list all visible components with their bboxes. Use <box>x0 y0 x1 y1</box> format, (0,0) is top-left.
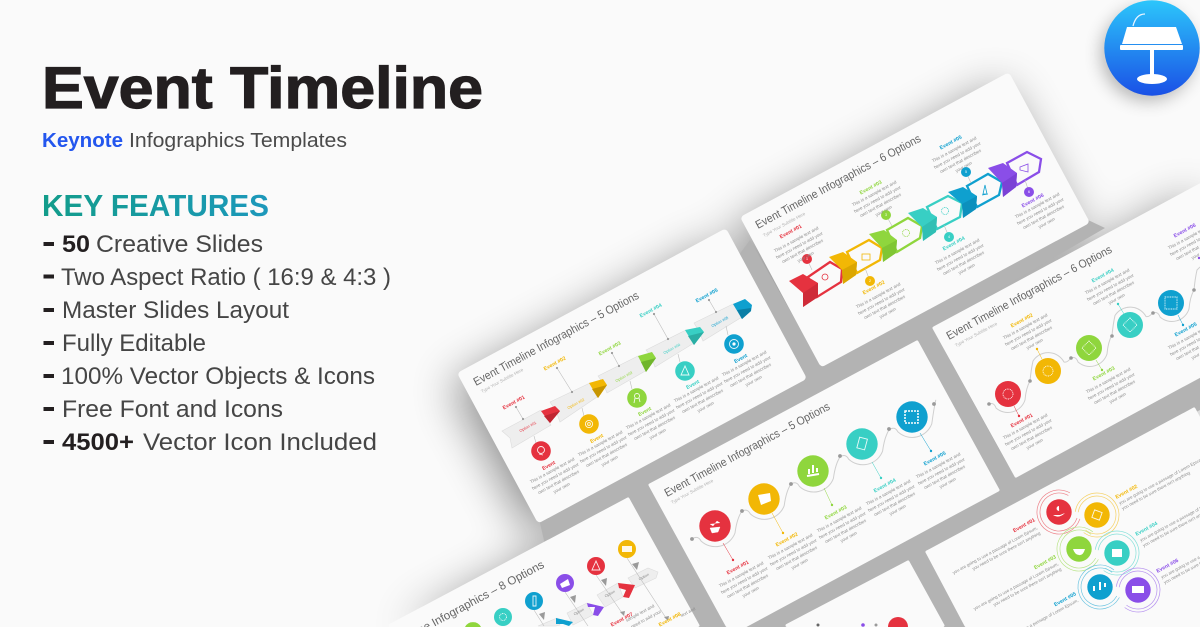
event text: text and <box>680 606 697 618</box>
event text: This is a sample text and <box>865 478 912 506</box>
event text: here you need to add your <box>867 483 916 512</box>
connecting arcs <box>690 400 936 547</box>
event titles and descriptions: here you need to add your <box>627 407 676 436</box>
wave arcs <box>987 267 1200 412</box>
event text: you need to be sure there isn't anything <box>971 530 1042 571</box>
event titles and descriptions: your own <box>600 454 619 467</box>
event titles and descriptions: own text that describes <box>681 387 724 414</box>
event text: here you need to add your <box>1086 272 1135 301</box>
event text: your own <box>1025 337 1044 350</box>
event text: This is a sample text and <box>851 179 898 207</box>
event titles and descriptions: Event <box>685 379 701 391</box>
event text: Event #02 <box>775 532 799 548</box>
feature list: 100% Vector Objects & Icons <box>61 363 375 390</box>
option labels: Option #03 <box>615 371 633 383</box>
number badges: 3 <box>885 213 887 217</box>
spiral rings <box>1031 484 1163 617</box>
event titles and descriptions: own text that describes <box>537 468 580 495</box>
event text: Event #01 <box>1010 413 1034 429</box>
event titles and descriptions: here you need to add your <box>675 380 724 409</box>
option labels: Option #04 <box>663 343 681 355</box>
event text: your own <box>1108 391 1127 404</box>
event text: your own <box>957 262 976 275</box>
event text: here you need to add your <box>818 510 867 539</box>
connectors <box>534 558 669 626</box>
hexagon outlines <box>808 152 1041 297</box>
event titles and descriptions: This is a sample text and <box>529 456 576 484</box>
event text: This is a sample text and <box>934 237 981 265</box>
ribbon segments <box>502 304 742 448</box>
event text: Event #04 <box>873 478 897 494</box>
event titles and descriptions: your own <box>552 481 571 494</box>
event text: Event #06 <box>1021 193 1045 209</box>
event titles and descriptions: your own <box>744 374 763 387</box>
event titles and descriptions: own text that describes <box>729 361 772 388</box>
feature list: Fully Editable <box>62 330 206 357</box>
chevron tails <box>789 163 1017 307</box>
number badges <box>802 167 1034 286</box>
event text: here you need to add your <box>933 140 982 169</box>
event text: your own <box>938 476 957 489</box>
event text: This is a sample text and <box>915 451 962 479</box>
event text: This is a sample text and <box>816 505 863 533</box>
event titles and descriptions: own text that describes <box>633 414 676 441</box>
event text: Event #01 <box>779 224 803 240</box>
event labels: Event #05 <box>695 288 719 304</box>
event text: Event #03 <box>1092 366 1116 382</box>
event text: own text that describes <box>1093 378 1136 405</box>
arrow tips <box>541 299 752 423</box>
ribbon <box>538 568 658 626</box>
event text: This is a sample text and <box>767 532 814 560</box>
panel: slide 6 options chevrons <box>740 72 1090 368</box>
option labels <box>519 316 729 433</box>
circle nodes <box>1046 499 1151 603</box>
event text: here you need to add your <box>720 565 769 594</box>
event text: your own <box>796 250 815 263</box>
event titles and descriptions: This is a sample text and <box>577 429 624 457</box>
icon: keynote <box>1102 0 1200 100</box>
event text: Event #05 <box>1053 591 1078 608</box>
event titles and descriptions: Event <box>541 460 557 472</box>
feature list: Two Aspect Ratio ( 16:9 & 4:3 ) <box>61 264 391 291</box>
feature list: Creative Slides <box>96 231 263 258</box>
feature list: Vector Icon Included <box>143 429 377 456</box>
event text: you are going to use a passage of Lorem Epsum, <box>972 561 1059 611</box>
title: Event Timeline <box>42 56 483 121</box>
chevrons <box>556 583 635 626</box>
event labels: Event #04 <box>639 303 663 319</box>
event text: your own <box>741 585 760 598</box>
event text: your own <box>1107 292 1126 305</box>
event text: Event #04 <box>942 236 966 252</box>
number badges: 5 <box>965 170 967 174</box>
event labels: Event #02 <box>543 356 567 372</box>
event text: This is a sample text and <box>931 135 978 163</box>
event titles and descriptions: here you need to add your <box>531 461 580 490</box>
event text: here you need to add your <box>1004 317 1053 346</box>
event titles and descriptions: own text that describes <box>585 441 628 468</box>
event text: Event #04 <box>1135 521 1159 538</box>
circle nodes <box>465 540 636 627</box>
ribbon: Option <box>638 573 650 581</box>
event text: own text that describes <box>863 293 906 320</box>
event text: your own <box>1025 437 1044 450</box>
event text: here you need to add your <box>917 456 966 485</box>
event text: own text that describes <box>942 249 985 276</box>
feature list: Master Slides Layout <box>62 297 289 324</box>
panel: slide spiral circles <box>927 409 1200 627</box>
event text: here you need to add your <box>857 286 906 315</box>
small icons <box>822 164 1028 280</box>
event text <box>772 134 1071 327</box>
event text: This is a sample text and <box>1084 267 1131 295</box>
event text: you are going to use a passage of Lorem Epsum, <box>951 525 1038 575</box>
event titles and descriptions: This is a sample text and <box>673 375 720 403</box>
ribbon: Option <box>573 608 585 616</box>
event text: Event #02 <box>862 280 886 296</box>
option labels: Option #01 <box>519 421 537 433</box>
event text: here you need to add your <box>769 537 818 566</box>
circle nodes <box>995 257 1200 417</box>
event text: own text that describes <box>1092 279 1135 306</box>
number badges: 2 <box>869 279 871 283</box>
event text <box>1001 221 1200 458</box>
panel: slide 5 options circles <box>650 342 998 626</box>
panel: slide 8 options <box>390 499 698 627</box>
event text: This is a sample text and <box>1014 191 1061 219</box>
panel: slide 6 options circles: Event Timeline Infographics – 6 Options <box>944 243 1114 343</box>
event text: Event #01 <box>1012 517 1037 534</box>
feature list <box>44 231 391 456</box>
event titles and descriptions: This is a sample text and <box>721 349 768 377</box>
panel: slide 6 options chevrons: Type Your Subtitle Here <box>762 211 807 238</box>
event text: This is a sample text and <box>718 560 765 588</box>
event text: Event #02 <box>1115 484 1139 501</box>
event text: own text that describes <box>781 237 824 264</box>
panel: slide bottom centre <box>787 562 943 627</box>
event text <box>951 455 1200 627</box>
event text: you need to be sure there isn't anything <box>1121 469 1191 510</box>
event text: Event #03 <box>1033 554 1058 571</box>
event text: Event #04 <box>1091 268 1115 284</box>
event text: This is a sample text and <box>1085 366 1132 394</box>
event titles and descriptions: your own <box>648 427 667 440</box>
event text: your own <box>878 306 897 319</box>
event text: your own <box>954 160 973 173</box>
panel: slide 5 options ribbon: Type Your Subtitle Here <box>480 367 525 394</box>
event text: own text that describes <box>939 147 982 174</box>
event text: your own <box>839 530 858 543</box>
panel: slide 5 options circles: Type Your Subtitle Here <box>670 478 715 505</box>
event text: own text that describes <box>923 463 966 490</box>
feature list: 50 <box>62 231 90 258</box>
circle nodes <box>699 401 932 561</box>
event text: Event #01 <box>726 560 750 576</box>
subtitle <box>42 130 347 152</box>
event labels: Event #03 <box>598 341 622 357</box>
panel: slide 6 options chevrons: Event Timeline Infographics – 6 Options <box>753 132 923 232</box>
event titles and descriptions: here you need to add your <box>579 434 628 463</box>
panel: slide 5 options ribbon: Event Timeline Infographics – 5 Options <box>471 289 641 389</box>
subtitle: Keynote <box>42 130 123 152</box>
event titles and descriptions: here you need to add your <box>723 354 772 383</box>
event text: Event #03 <box>824 505 848 521</box>
event text: sample text and <box>625 603 656 623</box>
event text: Event #03 <box>859 180 883 196</box>
event text: own text that describes <box>873 490 916 517</box>
option labels: Option #02 <box>567 398 585 410</box>
event text <box>610 603 697 627</box>
number badges: 1 <box>806 257 808 261</box>
panel: slide 5 options ribbon <box>457 228 807 524</box>
event text: This is a sample text and <box>1002 412 1049 440</box>
event text: Event #05 <box>1174 322 1198 338</box>
event text: own text that describes <box>775 544 818 571</box>
event titles and descriptions: This is a sample text and <box>625 402 672 430</box>
event titles and descriptions: Event <box>637 406 653 418</box>
number badges: 6 <box>1028 190 1030 194</box>
event text: here you need to add your <box>1004 417 1053 446</box>
event text: here you need to add your <box>936 242 985 271</box>
icon circles <box>531 334 744 461</box>
event titles and descriptions <box>528 348 778 502</box>
event text: own text that describes <box>824 517 867 544</box>
event text: here you need to add your <box>775 230 824 259</box>
event text: your own <box>874 204 893 217</box>
event text: own text that describes <box>1022 203 1065 230</box>
heading: key features: KEY FEATURES <box>42 188 269 223</box>
event text: your own <box>1037 216 1056 229</box>
event text: Event #02 <box>1010 313 1034 329</box>
event text: here you need to add your <box>1016 196 1065 225</box>
event titles and descriptions: your own <box>696 400 715 413</box>
event text: This is a sample text and <box>773 225 820 253</box>
feature list: 4500+ <box>62 429 134 456</box>
feature list: Free Font and Icons <box>62 396 283 423</box>
event labels: Event #01 <box>502 395 526 411</box>
subtitle: Infographics Templates <box>129 130 347 152</box>
ribbon: Option <box>604 590 616 598</box>
event text <box>717 450 972 606</box>
event text: own text that describes <box>726 572 769 599</box>
event text: Event #05 <box>923 451 947 467</box>
event text: you need to be sure there isn't anything <box>992 566 1063 607</box>
event text: here you need to add your <box>853 184 902 213</box>
option labels: Option #05 <box>711 316 729 328</box>
number badges: 4 <box>948 235 950 239</box>
event text: your own <box>790 557 809 570</box>
panel: slide 6 options circles <box>934 185 1200 476</box>
event text: This is a sample text and <box>855 281 902 309</box>
panel: slide 5 options circles: Event Timeline Infographics – 5 Options <box>662 400 832 500</box>
connector lines <box>515 299 728 443</box>
event titles and descriptions: Event <box>733 353 749 365</box>
event text: Event #06 <box>1156 558 1180 575</box>
event text: own text that describes <box>1010 424 1053 451</box>
event text: Event #06 <box>1173 223 1197 239</box>
event text: Event #05 <box>939 135 963 151</box>
event text: your own <box>888 503 907 516</box>
event text: own text that describes <box>1010 324 1053 351</box>
event text: here you need to add your <box>1087 371 1136 400</box>
panel: slide 6 options circles: Type Your Subtitle Here <box>954 321 999 348</box>
event text: This is a sample text and <box>1002 312 1049 340</box>
event labels <box>502 288 719 411</box>
event text: own text that describes <box>859 191 902 218</box>
event titles and descriptions: Event <box>589 433 605 445</box>
